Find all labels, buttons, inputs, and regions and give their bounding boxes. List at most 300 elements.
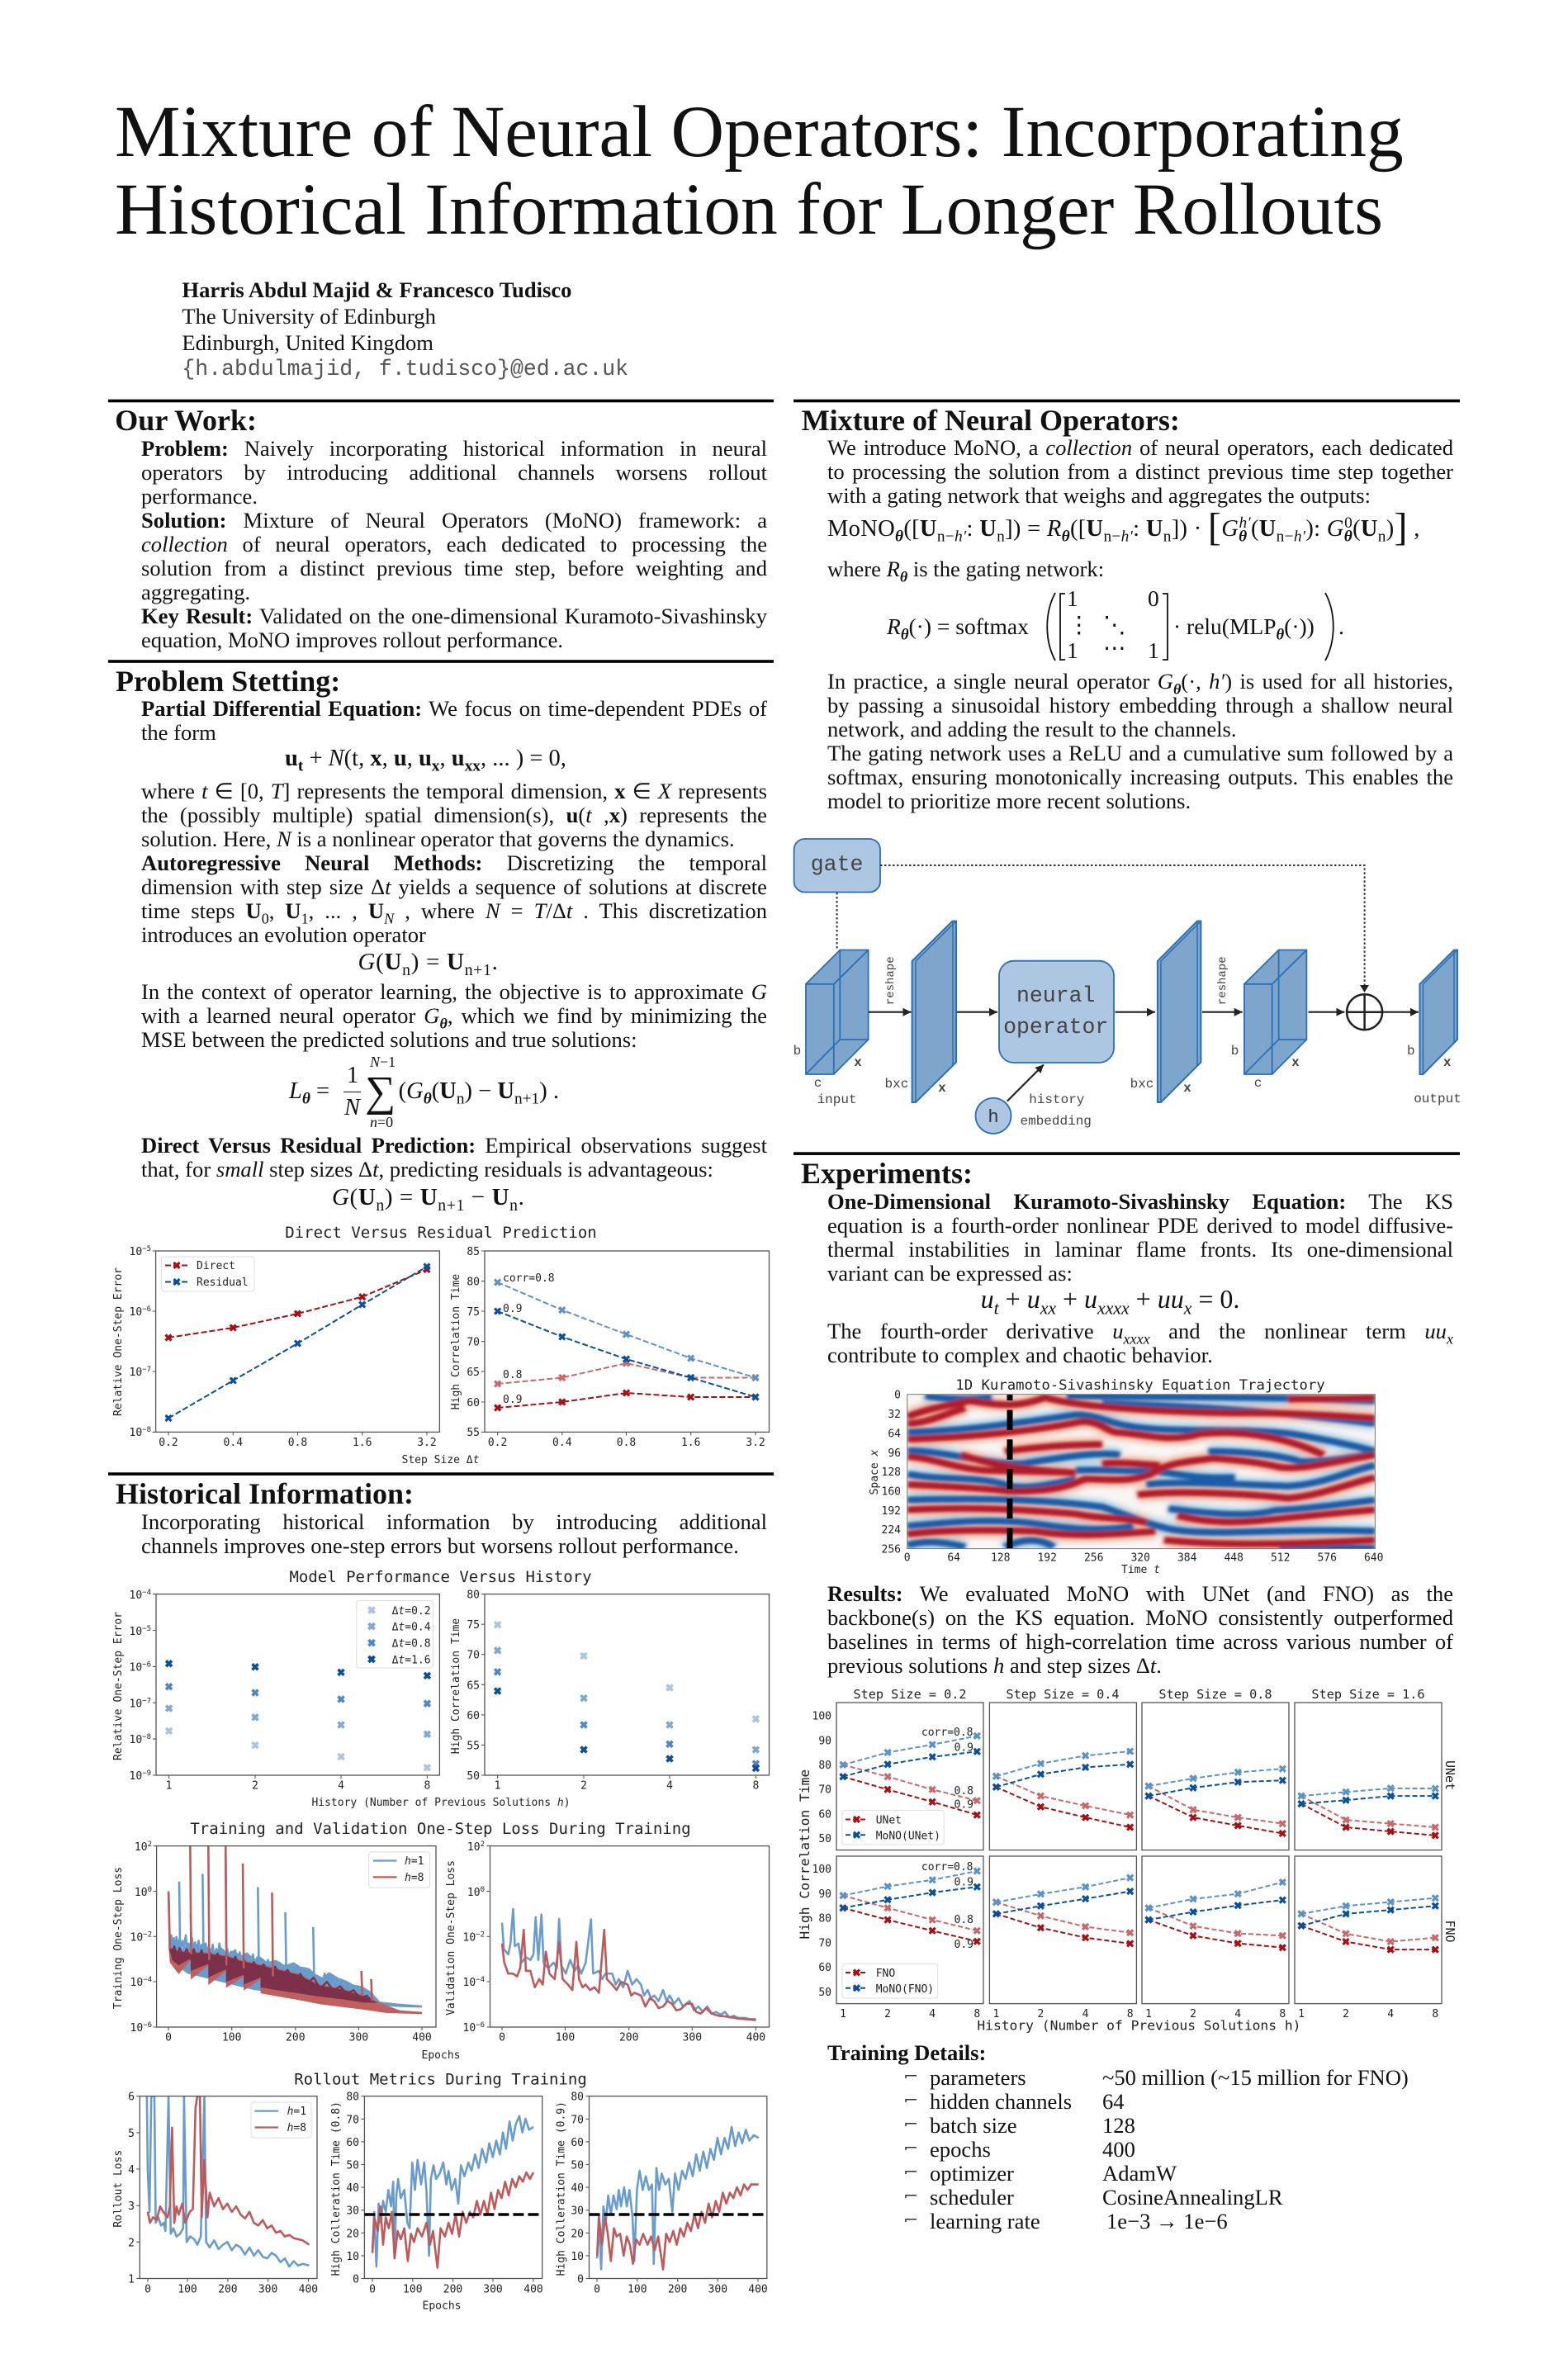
text: direct versus residual xyxy=(141,1133,767,1181)
correlation labels: 0.9 xyxy=(955,1876,973,1888)
panel: validation loss: 10 xyxy=(462,1932,476,1944)
text: fourth-order term xyxy=(827,1318,1453,1367)
panel: high correlation time 0.9: 300 xyxy=(708,2284,727,2296)
panel: high correlation time 0.9: 400 xyxy=(748,2284,768,2296)
text: KS equation: variant can be expressed as: xyxy=(827,1260,1073,1285)
panel: high correlation time 0.9: 100 xyxy=(628,2284,647,2296)
panel: high correlation time vs step size: 75 xyxy=(467,1306,480,1319)
panel: rollout loss: 300 xyxy=(258,2284,277,2296)
axis ticks: 64 xyxy=(947,1551,960,1564)
neural operator box: neural xyxy=(1016,983,1095,1008)
equation: PDE: ut + N(t, x, u, ux, uxx, ... ) = 0, xyxy=(285,746,566,775)
y ticks: 80 xyxy=(818,1760,831,1772)
text: fourth-order term: The fourth-order derivative uxxxx and the nonlinear term uux xyxy=(827,1318,1453,1347)
column titles: Step Size = 0.2 xyxy=(853,1687,967,1702)
legend: FNO xyxy=(842,1964,938,1998)
table: training details xyxy=(930,2065,1409,2234)
panel: high correlation time 0.8: 40 xyxy=(346,2182,359,2195)
equation: gating matrix: ⋯ xyxy=(1103,635,1126,661)
table: training details: epochs xyxy=(930,2137,991,2162)
panel: validation loss: 0 xyxy=(481,1886,485,1894)
panel: error vs history: −5 xyxy=(142,1625,151,1633)
panel: high correlation time 0.9: 80 xyxy=(571,2091,584,2104)
text: MoNO intro: with a gating network that weighs and aggregates the outputs: xyxy=(827,483,1371,508)
panel: training loss: Training One-Step Loss xyxy=(112,1867,125,2009)
axis ticks: 128 xyxy=(882,1466,901,1479)
panel: validation loss: −2 xyxy=(476,1930,485,1939)
panel: correlation vs history: 1 xyxy=(495,1780,501,1793)
reshaped sheet 2 xyxy=(1158,921,1201,1102)
text: operator learning: MSE between the predicted solutions and true solutions: xyxy=(141,1027,637,1052)
panel: correlation vs history: 70 xyxy=(467,1650,480,1662)
dashed marker line xyxy=(1007,1395,1012,1549)
panel: validation loss: 200 xyxy=(619,2032,638,2044)
panel: relative one-step error: 10 xyxy=(129,1246,142,1258)
x ticks: 4 xyxy=(1082,2008,1089,2020)
diagram labels: bxc xyxy=(884,1077,908,1092)
text: MoNO intro: to processing the solution from a distinct previous time step together xyxy=(827,459,1453,484)
panel: training loss: 10 xyxy=(130,2022,143,2035)
panel: validation loss: −4 xyxy=(476,1976,485,1984)
legend: h=1 xyxy=(287,2106,306,2118)
panel: error vs history: Relative One-Step Error xyxy=(112,1612,125,1760)
panel: high correlation time vs step size: 0.9 xyxy=(503,1394,522,1406)
equation: loss: n=0 xyxy=(370,1114,393,1130)
panel: high correlation time vs step size: 60 xyxy=(467,1397,480,1409)
heading: experiments: Experiments: xyxy=(801,1156,973,1189)
diagram: MoNO architecture xyxy=(793,839,1461,1134)
y ticks: 80 xyxy=(818,1913,831,1926)
equation: residual: G(Un) = Un+1 − Un. xyxy=(332,1184,524,1215)
equation: loss: (Gθ(Un) − Un+1) . xyxy=(399,1078,559,1108)
y ticks: 70 xyxy=(818,1937,831,1949)
axis ticks: 256 xyxy=(882,1544,901,1556)
panel: high correlation time 0.8: 0 xyxy=(369,2284,376,2296)
text: operator learning: In the context of operator learning, the objective is to approximate G xyxy=(141,979,767,1004)
equation: loss: 1 xyxy=(347,1063,358,1088)
legend: h=1 xyxy=(405,1855,424,1868)
equation: gating matrix: 1 xyxy=(1067,585,1078,611)
table: training details: batch size xyxy=(930,2113,1017,2138)
chart title: Model Performance Versus History xyxy=(289,1568,592,1586)
panel: high correlation time 0.9: 10 xyxy=(571,2251,584,2263)
text: our work: Problem: Naively incorporating historical information in neural xyxy=(141,436,767,461)
panel: relative one-step error: −8 xyxy=(142,1426,151,1434)
panel: high correlation time 0.8: 70 xyxy=(346,2114,359,2126)
text: definitions and autoregressive methods xyxy=(141,778,767,946)
panel: relative one-step error: 0.8 xyxy=(288,1437,307,1449)
y ticks: 60 xyxy=(818,1962,831,1974)
panel: error vs history: 10 xyxy=(129,1770,142,1783)
correlation labels: 0.9 xyxy=(955,1939,973,1951)
panel: high correlation time 0.9: 200 xyxy=(668,2284,687,2296)
correlation labels: 0.9 xyxy=(955,1741,973,1754)
correlation labels: corr=0.8 xyxy=(921,1727,973,1739)
chart title: Direct Versus Residual Prediction xyxy=(285,1224,597,1242)
panel: training loss: 0 xyxy=(165,2032,172,2044)
panel: high correlation time 0.9: 70 xyxy=(571,2114,584,2126)
text: in practice: model to prioritize more recent solutions. xyxy=(827,788,1191,812)
email: {h.abdulmajid, f.tudisco}@ed.ac.uk xyxy=(182,357,628,381)
dotted gate connections xyxy=(837,865,1365,985)
text: our work xyxy=(141,436,767,652)
legend: Δt=1.6 xyxy=(392,1655,431,1666)
text: results: Results: We evaluated MoNO with UNet (and FNO) as the xyxy=(827,1581,1453,1606)
panel: high correlation time vs step size: 70 xyxy=(467,1337,480,1349)
panel: high correlation time vs step size: 55 xyxy=(467,1427,480,1439)
equation: gating matrix: Rθ(·) = softmax xyxy=(887,613,1029,644)
panel: error vs history: 4 xyxy=(338,1780,344,1793)
panel: correlation vs history: 60 xyxy=(467,1710,480,1722)
table: training details: ~50 million (~15 million for FNO) xyxy=(1102,2065,1409,2090)
text: in practice xyxy=(827,669,1453,812)
legend: UNet: UNet xyxy=(876,1815,902,1826)
table: training details: AdamW xyxy=(1102,2161,1177,2186)
legend: Direct xyxy=(197,1260,235,1272)
text: direct versus residual: that, for small step sizes Δt, predicting residuals is advantageous: xyxy=(141,1156,713,1181)
axis ticks: 32 xyxy=(888,1409,901,1421)
panel: high correlation time vs step size: 0.2 xyxy=(488,1437,507,1449)
panel: high correlation time 0.9: 20 xyxy=(571,2228,584,2240)
panel: high correlation time 0.8: 400 xyxy=(523,2284,543,2296)
panel: training loss: 10 xyxy=(130,1932,143,1944)
panel: relative one-step error: 0.2 xyxy=(159,1437,178,1449)
text: in practice: network, and adding the result to the channels. xyxy=(827,717,1237,741)
diagram labels: output xyxy=(1414,1092,1461,1106)
panel: training loss: 100 xyxy=(222,2032,241,2044)
axis ticks: 64 xyxy=(888,1428,901,1440)
panel: high correlation time 0.8: 60 xyxy=(346,2137,359,2149)
chart: results grid of high correlation time xyxy=(797,1687,1457,2034)
text: KS equation xyxy=(827,1189,1453,1285)
x ticks: 2 xyxy=(884,2008,891,2020)
diagram labels xyxy=(793,956,1461,1129)
panel: error vs history: 10 xyxy=(129,1626,142,1638)
panel: training loss: −6 xyxy=(143,2021,152,2030)
history node h xyxy=(976,1098,1011,1134)
panel: training loss: 0 xyxy=(148,1886,152,1894)
panel: correlation vs history: 75 xyxy=(467,1619,480,1632)
y ticks xyxy=(812,1711,831,1999)
equation: gating matrix: 0 xyxy=(1148,585,1159,611)
text: our work: Key Result: Validated on the one-dimensional Kuramoto-Sivashinsky xyxy=(141,603,767,628)
text: operator learning xyxy=(141,979,767,1052)
legend xyxy=(357,1600,433,1668)
axis ticks: 320 xyxy=(1130,1551,1150,1564)
x ticks: 8 xyxy=(1279,2008,1286,2020)
x ticks: 8 xyxy=(973,2008,980,2020)
panel: rollout loss: 6 xyxy=(128,2091,135,2104)
panel: relative one-step error xyxy=(112,1245,439,1449)
panel: validation loss: 0 xyxy=(499,2032,505,2044)
y ticks: 50 xyxy=(818,1833,831,1845)
diagram labels: c xyxy=(814,1076,822,1091)
legend: FNO: MoNO(FNO) xyxy=(876,1983,934,1996)
diagram labels: x xyxy=(1184,1081,1191,1095)
panel: error vs history: 1 xyxy=(166,1780,173,1793)
axis ticks: 512 xyxy=(1271,1551,1290,1564)
panel: validation loss: 10 xyxy=(462,1977,476,1989)
arrowhead into sum xyxy=(1360,985,1369,992)
heading: problem setting: Problem Stetting: xyxy=(116,665,340,698)
x ticks: 8 xyxy=(1432,2008,1438,2020)
text: in practice: The gating network uses a ReLU and a cumulative sum followed by a xyxy=(827,740,1453,765)
rule: problem setting xyxy=(108,660,774,663)
diagram labels: embedding xyxy=(1020,1114,1092,1129)
panel: rollout loss: 200 xyxy=(218,2284,238,2296)
diagram labels: history xyxy=(1029,1092,1085,1107)
text: definitions and autoregressive methods: where t ∈ [0, T] represents the temporal dimension, x ∈ X represents xyxy=(141,778,767,803)
text: fourth-order term: contribute to complex and chaotic behavior. xyxy=(827,1343,1213,1367)
panel: correlation vs history xyxy=(450,1589,770,1793)
panel: training loss: 200 xyxy=(286,2032,306,2044)
panel: rollout loss: 400 xyxy=(299,2284,318,2296)
panel: high correlation time 0.9: 0 xyxy=(577,2274,584,2286)
heading: our work: Our Work: xyxy=(115,404,257,437)
panel: validation loss: 10 xyxy=(467,1887,481,1899)
panel: training loss: −4 xyxy=(143,1976,152,1984)
panel: high correlation time 0.8: 20 xyxy=(346,2228,359,2240)
table: training details: 128 xyxy=(1102,2113,1135,2138)
axis ticks: 640 xyxy=(1364,1551,1383,1564)
panel: rollout loss: 4 xyxy=(128,2164,135,2177)
panel: high correlation time vs step size: High Correlation Time xyxy=(450,1274,462,1409)
text: definitions and autoregressive methods: solution. Here, N is a nonlinear operator that governs the dynamics. xyxy=(141,826,735,850)
sum node xyxy=(1347,994,1382,1030)
column titles: Step Size = 0.4 xyxy=(1006,1687,1120,1702)
panel: high correlation time 0.8: 30 xyxy=(346,2205,359,2218)
title: Mixture of Neural Operators: Incorporating xyxy=(115,91,1404,173)
panel: relative one-step error: 10 xyxy=(129,1367,142,1379)
table: training details: optimizer xyxy=(930,2161,1014,2186)
axis ticks: 224 xyxy=(882,1524,901,1537)
panel: high correlation time vs step size: 0.8 xyxy=(503,1369,522,1381)
panel: validation loss: 400 xyxy=(746,2032,765,2044)
axis ticks: 256 xyxy=(1084,1551,1103,1564)
axis ticks: 448 xyxy=(1224,1551,1244,1564)
equation: loss: Lθ = xyxy=(289,1078,329,1108)
y ticks: 60 xyxy=(818,1808,831,1821)
legend xyxy=(251,2102,311,2138)
axis labels: High Correlation Time xyxy=(797,1769,812,1940)
diagram labels: b xyxy=(793,1044,801,1059)
text: MoNO intro xyxy=(827,435,1453,508)
panel: correlation vs history: 80 xyxy=(467,1589,480,1602)
axis ticks: 128 xyxy=(991,1551,1010,1564)
text: our work: equation, MoNO improves rollout performance. xyxy=(141,628,563,652)
panel: high correlation time vs step size: 1.6 xyxy=(681,1437,700,1449)
legend: Δt=0.4 xyxy=(392,1622,431,1634)
x ticks: 8 xyxy=(1127,2008,1134,2020)
x axis label: History (Number of Previous Solutions h) xyxy=(311,1797,571,1809)
panel: correlation vs history: 65 xyxy=(467,1679,480,1692)
chart: 1D Kuramoto-Sivashinsky trajectory xyxy=(869,1377,1383,1576)
panel: high correlation time 0.9: 40 xyxy=(571,2182,584,2195)
text: historical information xyxy=(141,1509,767,1557)
panel: error vs history: 10 xyxy=(129,1734,142,1746)
panel: rollout loss: Rollout Loss xyxy=(112,2150,125,2228)
panel: error vs history: 2 xyxy=(252,1780,258,1793)
panel: rollout loss: 0 xyxy=(144,2284,151,2296)
legend: h=8 xyxy=(287,2122,306,2134)
panel: high correlation time 0.8: 80 xyxy=(346,2091,359,2104)
axis ticks: 96 xyxy=(888,1447,901,1460)
diagram labels: b xyxy=(1407,1044,1415,1059)
diagram labels: x xyxy=(855,1055,862,1069)
correlation labels: 0.8 xyxy=(955,1785,973,1798)
table: training details: learning rate xyxy=(930,2209,1040,2234)
panel: FNO step size 0.8 xyxy=(1149,1883,1282,1948)
text: historical information: channels improves one-step errors but worsens rollout performance. xyxy=(141,1532,739,1557)
panel: error vs history: −9 xyxy=(142,1769,151,1778)
panel: validation loss: 10 xyxy=(467,1841,481,1854)
text: KS equation: One-Dimensional Kuramoto-Sivashinsky Equation: The KS xyxy=(827,1189,1453,1214)
panel: high correlation time 0.8: 50 xyxy=(346,2160,359,2172)
axis ticks: 192 xyxy=(1037,1551,1057,1564)
authors: The University of Edinburgh xyxy=(182,304,436,329)
correlation labels: corr=0.8 xyxy=(921,1861,973,1874)
text: in practice: softmax, ensuring monotonically increasing outputs. This enables the xyxy=(827,765,1453,789)
axis ticks: 0 xyxy=(904,1551,911,1564)
panel: UNet step size 0.2 xyxy=(843,1736,977,1815)
equation: gating matrix: . xyxy=(1338,613,1344,639)
equation: gating matrix: · relu(MLPθ(·)) xyxy=(1173,613,1315,644)
legend xyxy=(369,1852,430,1888)
rule: historical information xyxy=(108,1472,774,1476)
panel: relative one-step error: −7 xyxy=(142,1366,151,1374)
neural operator box xyxy=(999,961,1114,1063)
panel: error vs history: −8 xyxy=(142,1733,151,1741)
chart: direct versus residual prediction xyxy=(112,1224,770,1466)
panel: rollout loss xyxy=(112,2091,318,2296)
panel: correlation vs history: 55 xyxy=(467,1740,480,1752)
diagram labels: b xyxy=(1231,1044,1239,1059)
x ticks: 4 xyxy=(1234,2008,1241,2020)
panel: high correlation time vs step size: 3.2 xyxy=(746,1437,765,1449)
text: definitions and autoregressive methods: dimension with step size Δt yields a sequence of solutions at discrete xyxy=(141,874,767,898)
neural operator box: operator xyxy=(1003,1015,1108,1040)
title xyxy=(115,91,1404,250)
table: training details: 400 xyxy=(1102,2137,1135,2162)
table: training details: 1e−3 → 1e−6 xyxy=(1106,2209,1228,2234)
equation: loss: ∑ xyxy=(365,1068,396,1116)
panel: error vs history: 10 xyxy=(129,1698,142,1711)
heading: historical information: Historical Information: xyxy=(116,1476,414,1509)
table: training details: parameters xyxy=(930,2065,1026,2090)
x ticks: 4 xyxy=(929,2008,936,2020)
panel: rollout loss: 2 xyxy=(128,2237,135,2249)
rule: experiments xyxy=(793,1152,1460,1155)
panel: error vs history: 10 xyxy=(129,1589,142,1602)
text: our work: solution from a distinct previous time step, before weighting and xyxy=(141,555,767,580)
gate box xyxy=(794,839,880,892)
y ticks: 100 xyxy=(812,1864,831,1876)
text: KS equation: equation is a fourth-order nonlinear PDE derived to model diffusive- xyxy=(827,1212,1453,1237)
panel: relative one-step error: 1.6 xyxy=(353,1437,372,1449)
panel: rollout loss: 100 xyxy=(178,2284,197,2296)
panel: training loss xyxy=(112,1840,436,2044)
panel: high correlation time 0.9: High Colleration Time (0.9) xyxy=(555,2101,568,2276)
text: results: previous solutions h and step sizes Δt. xyxy=(827,1653,1162,1678)
column titles xyxy=(853,1687,1425,1702)
equation: evolution operator: G(Un) = Un+1. xyxy=(358,949,499,979)
panel: high correlation time 0.8: High Colleration Time (0.8) xyxy=(330,2101,343,2276)
panel: high correlation time 0.8: 0 xyxy=(353,2274,359,2286)
panel: error vs history: −6 xyxy=(142,1661,151,1670)
panel: validation loss: 2 xyxy=(481,1840,485,1849)
correlation labels xyxy=(921,1727,973,1951)
panel: high correlation time vs step size: 0.4 xyxy=(552,1437,572,1449)
panel: correlation vs history: 8 xyxy=(752,1780,759,1793)
panel: training loss: 10 xyxy=(130,1977,143,1989)
panel: FNO step size 0.2 xyxy=(843,1871,977,1941)
authors: Edinburgh, United Kingdom xyxy=(182,330,433,355)
x ticks xyxy=(840,2008,1438,2020)
equation: loss: N xyxy=(344,1095,360,1120)
output sheet xyxy=(1420,950,1457,1074)
axis ticks: 576 xyxy=(1317,1551,1337,1564)
text: definitions and autoregressive methods: the (possibly multiple) spatial dimension(s), u(t ,x) represents the xyxy=(141,803,767,827)
table: training details: hidden channels xyxy=(930,2089,1072,2114)
panel: high correlation time vs step size: 85 xyxy=(467,1246,480,1258)
panel: relative one-step error: −6 xyxy=(142,1305,151,1314)
panel: relative one-step error: 0.4 xyxy=(224,1437,243,1449)
panel: high correlation time 0.8: 100 xyxy=(403,2284,423,2296)
y ticks: 70 xyxy=(818,1784,831,1797)
axis labels: History (Number of Previous Solutions h) xyxy=(977,2018,1300,2034)
diagram labels: reshape xyxy=(1216,956,1229,1005)
diagram labels: x xyxy=(939,1081,946,1095)
panel: high correlation time vs step size: 0.9 xyxy=(503,1303,522,1315)
panel: high correlation time 0.9: 0 xyxy=(594,2284,600,2296)
text: MoNO intro: We introduce MoNO, a collection of neural operators, each dedicated xyxy=(827,435,1453,460)
title: Historical Information for Longer Rollouts xyxy=(115,168,1383,250)
panel: UNet step size 1.6 xyxy=(1301,1788,1435,1836)
x ticks: 2 xyxy=(1343,2008,1349,2020)
text: PDE: the form xyxy=(141,720,216,745)
text: our work: aggregating. xyxy=(141,580,250,604)
panel: high correlation time 0.9: 30 xyxy=(571,2205,584,2218)
panel: high correlation time 0.9: 60 xyxy=(571,2137,584,2149)
panel: high correlation time vs step size: 80 xyxy=(467,1277,480,1289)
panel: relative one-step error: 10 xyxy=(129,1306,142,1319)
x axis label: Epochs xyxy=(422,2049,460,2062)
panel: UNet step size 0.4 xyxy=(996,1751,1130,1827)
chart: model performance versus history xyxy=(112,1568,770,1809)
equation: gating matrix: 1 xyxy=(1148,637,1159,663)
panel: validation loss: 100 xyxy=(556,2032,575,2044)
legend: Residual xyxy=(197,1277,249,1289)
panel: high correlation time 0.9 xyxy=(555,2091,768,2296)
panel: error vs history: 8 xyxy=(424,1780,430,1793)
diagram labels: c xyxy=(1254,1076,1262,1091)
x ticks: 1 xyxy=(1298,2008,1305,2020)
column titles: Step Size = 1.6 xyxy=(1311,1687,1425,1702)
panel: training loss: −2 xyxy=(143,1930,152,1939)
text: PDE: Partial Differential Equation: We focus on time-dependent PDEs of xyxy=(141,696,767,721)
x axis label: Epochs xyxy=(423,2300,461,2313)
legend: UNet: MoNO(UNet) xyxy=(876,1830,940,1842)
panel: relative one-step error: 10 xyxy=(129,1427,142,1439)
text: where R: where Rθ is the gating network: xyxy=(827,557,1104,585)
x ticks: 1 xyxy=(992,2008,999,2020)
text: definitions and autoregressive methods: time steps U0, U1, ... , UN , where N = T/Δt . This discretization xyxy=(141,898,767,926)
flow arrows xyxy=(869,1012,1419,1101)
chart title: Training and Validation One-Step Loss During Training xyxy=(190,1820,691,1838)
panel: error vs history: 10 xyxy=(129,1661,142,1675)
text: in practice: by passing a sinusoidal history embedding through a shallow neural xyxy=(827,692,1453,717)
panel: validation loss: −6 xyxy=(476,2021,485,2030)
